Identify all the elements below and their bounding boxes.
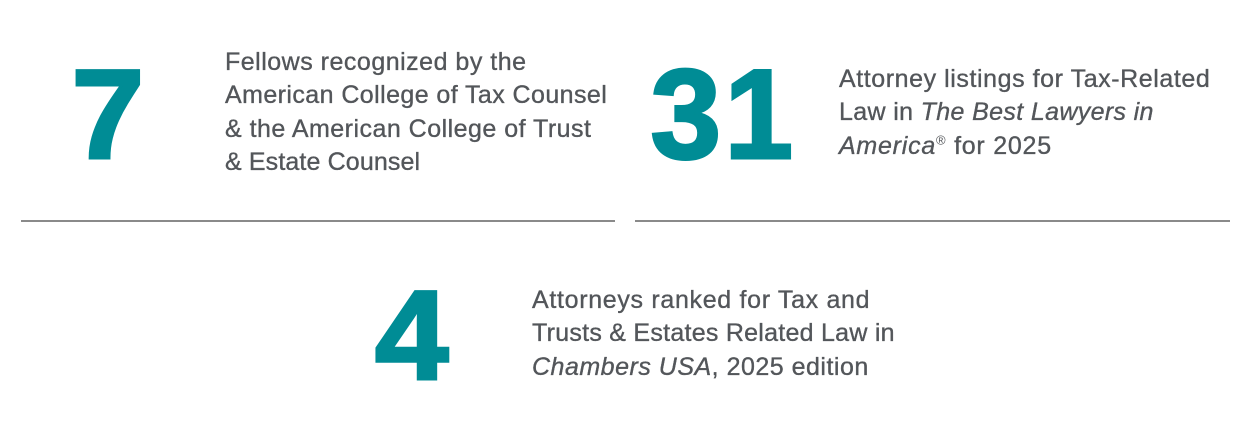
stat number: 31 [650,43,793,185]
text: fellows description [224,48,607,176]
divider right [635,220,1230,222]
stat number: 31: 3 [650,43,721,185]
divider left [21,220,615,222]
text: fellows description: & the American College of Trust [225,115,591,143]
text: chambers description: Chambers USA, 2025 edition [532,353,869,381]
text: chambers description [532,286,895,381]
text: chambers description: Attorneys ranked for Tax and [532,286,870,314]
stat number: 31: 1 [724,43,793,185]
stat number: 7: 7 [72,44,144,186]
text: fellows description: Fellows recognized by the [225,48,527,76]
text: fellows description: American College of Tax Counsel [225,81,607,109]
text: best lawyers description: Law in The Best Lawyers in [839,98,1154,126]
stat number: 4: 4 [375,265,448,406]
text: chambers description: Trusts & Estates Related Law in [532,319,895,347]
text: best lawyers description: America® for 2025 [839,132,1052,160]
text: best lawyers description [838,65,1210,160]
text: best lawyers description: Attorney listings for Tax-Related [839,65,1210,93]
text: fellows description: & Estate Counsel [225,148,420,176]
